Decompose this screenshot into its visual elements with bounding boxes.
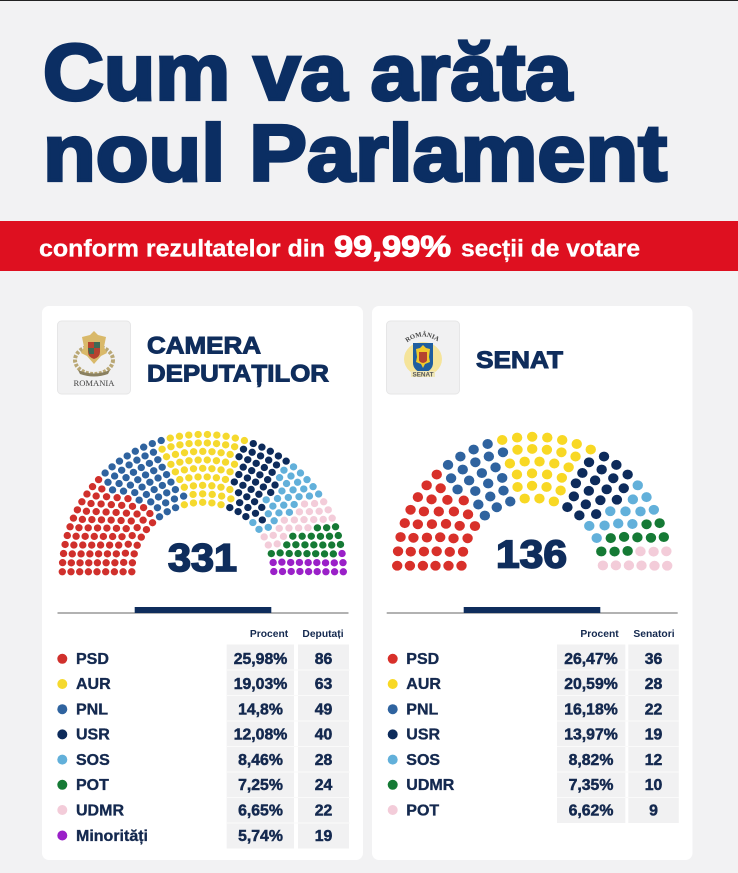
row: PNL: 22 (645, 702, 662, 718)
row: AUR (388, 676, 662, 693)
table: Senat results: Procent (580, 629, 619, 640)
row: USR: 13,97% (564, 727, 618, 744)
heading: Senat: SENAT (476, 347, 563, 374)
row: UDMR: 7,35% (569, 777, 613, 794)
row: POT (57, 777, 332, 794)
row: POT (388, 802, 658, 820)
table: Camera Deputaților results: Deputați (302, 629, 344, 640)
seats: PSD (397, 437, 667, 695)
table: Senat results (388, 629, 679, 823)
row: POT: 6,62% (569, 802, 613, 820)
panel: Senat (372, 306, 692, 860)
row: UDMR: UDMR (406, 777, 455, 794)
row: PSD: 25,98% (234, 651, 287, 668)
title: Cum va arăta (43, 28, 573, 116)
row: PSD (388, 651, 662, 668)
row: PSD: 86 (315, 651, 332, 668)
row: PSD: 36 (645, 651, 662, 668)
seats: PNL (62, 434, 343, 709)
row: PSD (57, 651, 332, 668)
row: SOS: 8,46% (238, 752, 283, 769)
row: Minorități (57, 828, 332, 845)
red subtitle band (0, 221, 738, 271)
title: noul Parlament (43, 108, 667, 198)
row: Minorități: 19 (315, 828, 332, 845)
row: AUR: AUR (406, 676, 441, 693)
table: Senat results: Senatori (633, 629, 675, 640)
divider (387, 607, 678, 614)
panel: Camera Deputaților (42, 306, 363, 860)
chart: hemicycle 136 seats (397, 437, 667, 695)
seats: UDMR (397, 437, 667, 695)
row: PNL: 14,8% (238, 702, 283, 718)
seats: PSD (62, 434, 343, 709)
row: POT: POT (76, 777, 109, 794)
row: USR: USR (76, 727, 110, 744)
seats: POT (62, 434, 343, 709)
table: Camera Deputaților results: Procent (250, 629, 289, 640)
row: UDMR: 10 (645, 777, 662, 794)
row: POT: POT (406, 802, 439, 820)
row: SOS: 8,82% (569, 752, 613, 769)
table: Camera Deputaților results (57, 629, 350, 848)
icon: Senat emblem: ROMÂNIA (404, 330, 438, 342)
row: USR (57, 727, 332, 744)
row: SOS: SOS (76, 752, 110, 769)
icon: Camera Deputaților emblem (58, 321, 130, 394)
row: SOS (388, 752, 662, 769)
row: PNL: 49 (315, 702, 332, 718)
row: USR: 12,08% (234, 727, 287, 744)
row: AUR: 28 (645, 676, 662, 693)
row: Minorități: 5,74% (238, 828, 283, 845)
seats: AUR (397, 437, 667, 695)
row: PSD: 26,47% (564, 651, 618, 668)
row: SOS: 28 (315, 752, 332, 769)
seats: SOS (397, 437, 667, 695)
row: USR: USR (406, 727, 441, 744)
icon: Camera Deputaților emblem: ROMANIA (74, 378, 115, 388)
row: AUR (57, 676, 332, 693)
row: UDMR (388, 777, 662, 794)
row: SOS: 12 (645, 752, 662, 769)
row: SOS: SOS (406, 752, 440, 769)
red subtitle band: secții de votare (461, 236, 640, 262)
row: PNL: PNL (76, 702, 108, 718)
heading: Camera Deputaților (147, 332, 329, 388)
total seats: 331: 331 (168, 537, 237, 580)
seats: PNL (397, 437, 667, 695)
row: SOS (57, 752, 332, 769)
row: UDMR: 6,65% (238, 802, 283, 820)
row: POT: 9 (649, 802, 658, 820)
row: POT: 24 (315, 777, 332, 794)
row: PSD: PSD (76, 651, 109, 668)
seats: UDMR (62, 434, 343, 709)
row: Minorități: Minorități (76, 828, 148, 845)
divider (58, 607, 348, 614)
row: AUR: 19,03% (234, 676, 287, 693)
seats: SOS (62, 434, 343, 709)
seats: USR (397, 437, 667, 695)
seats: POT (397, 437, 667, 695)
row: POT: 7,25% (238, 777, 283, 794)
icon: Senat emblem (386, 320, 460, 394)
row: USR: 40 (315, 727, 332, 744)
heading: Camera Deputaților: DEPUTAȚILOR (147, 360, 329, 388)
row: AUR: AUR (76, 676, 111, 693)
row: PSD: PSD (406, 651, 439, 668)
row: USR (388, 727, 662, 744)
row: PNL (57, 702, 332, 718)
total seats: 136: 136 (496, 534, 567, 576)
row: PNL: 16,18% (564, 702, 618, 718)
row: UDMR (57, 802, 332, 820)
seats: Minorități (62, 434, 343, 709)
red subtitle band: 99,99% (334, 230, 451, 264)
heading: Camera Deputaților: CAMERA (147, 332, 261, 360)
title (43, 28, 667, 198)
row: UDMR: 22 (315, 802, 332, 820)
row: PNL (388, 702, 662, 718)
row: USR: 19 (645, 727, 662, 744)
seats: USR (62, 434, 343, 709)
row: AUR: 63 (315, 676, 332, 693)
icon: Senat emblem: SENAT (412, 372, 434, 378)
seats: AUR (62, 434, 343, 709)
row: PNL: PNL (406, 702, 439, 718)
red subtitle band: conform rezultatelor din (39, 236, 325, 262)
row: AUR: 20,59% (564, 676, 618, 693)
row: UDMR: UDMR (76, 802, 124, 820)
chart: hemicycle 331 seats (62, 434, 343, 709)
